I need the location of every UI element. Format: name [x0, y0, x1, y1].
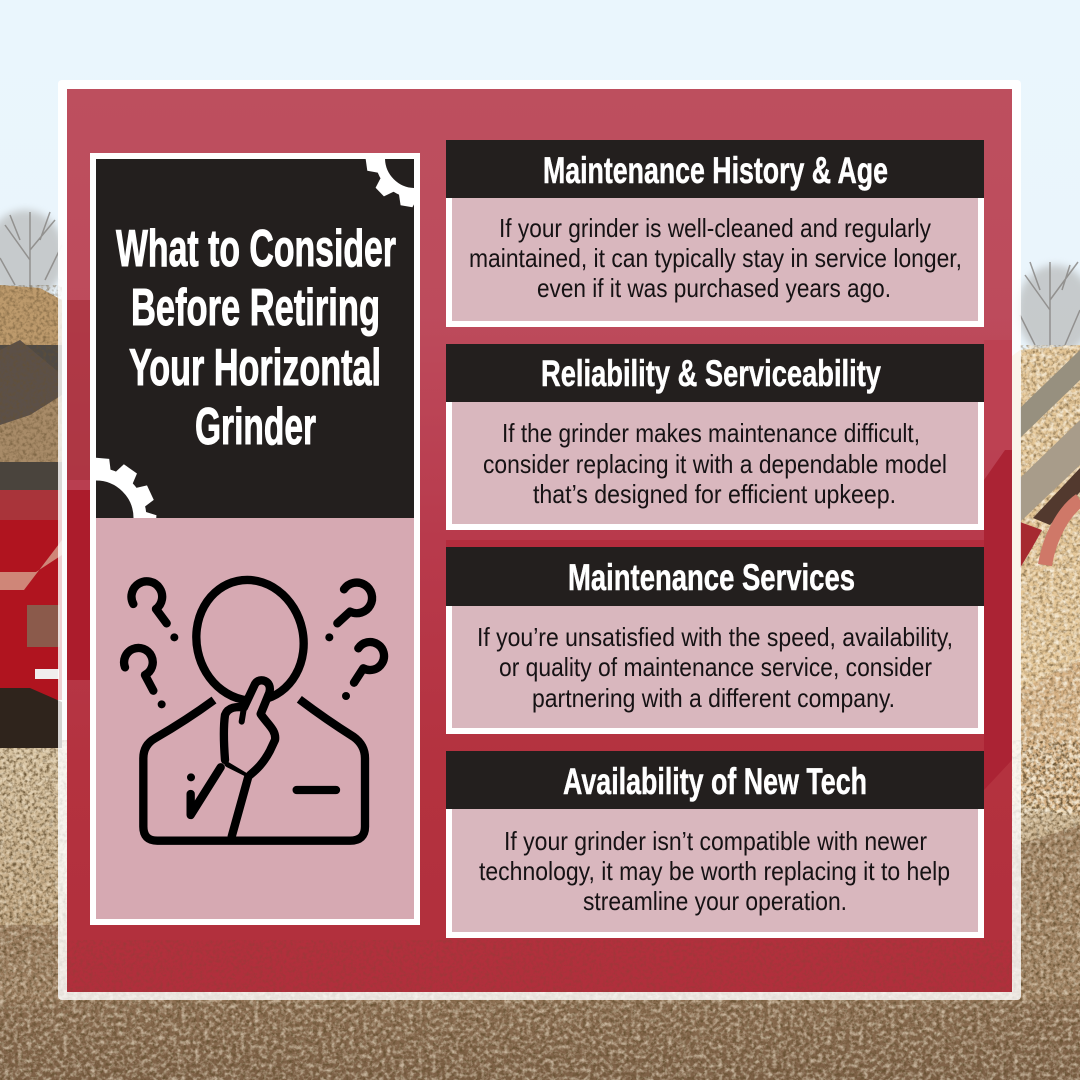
title: [116, 220, 396, 456]
card text: [469, 213, 962, 303]
card text: maintained, it can typically stay in service longer,: [469, 243, 962, 273]
card body: [449, 806, 981, 935]
card text: If your grinder is well-cleaned and regularly: [499, 213, 931, 243]
card header: [446, 344, 984, 402]
card text: partnering with a different company.: [532, 683, 895, 713]
panel: Maintenance History & Age: [446, 140, 984, 324]
title: Grinder: [195, 398, 316, 456]
card heading: Maintenance Services: [568, 557, 855, 598]
panel: left column: [90, 153, 420, 925]
title: Your Horizontal: [129, 339, 381, 397]
card text: [477, 622, 953, 713]
card body: [449, 603, 981, 731]
left column white border: [90, 153, 420, 925]
card text: [483, 418, 947, 509]
card header: [446, 140, 984, 198]
card text: streamline your operation.: [583, 886, 847, 916]
translucent white frame: [58, 80, 1021, 1000]
card heading: Availability of New Tech: [563, 761, 867, 802]
card text: technology, it may be worth replacing it to help: [479, 856, 950, 886]
panel: Maintenance Services: [446, 547, 984, 731]
title: Before Retiring: [131, 279, 380, 337]
left column dark header: [96, 159, 414, 518]
card text: consider replacing it with a dependable model: [483, 449, 947, 479]
icon: person thinking with question marks: [124, 570, 384, 841]
red panel: [67, 89, 1012, 992]
card heading: Maintenance History & Age: [543, 150, 888, 191]
panel: Availability of New Tech: [446, 751, 984, 935]
card text: If you’re unsatisfied with the speed, availability,: [477, 622, 953, 652]
card text: If your grinder isn’t compatible with newer: [504, 826, 927, 856]
card header: [446, 547, 984, 606]
icon: gear bottom left: [96, 458, 156, 518]
card text: even if it was purchased years ago.: [537, 273, 891, 303]
title: What to Consider: [116, 220, 396, 278]
card heading: Reliability & Serviceability: [541, 353, 881, 394]
card body: [449, 399, 981, 527]
icon: gear top right: [366, 159, 414, 208]
card body: [449, 195, 981, 324]
card text: or quality of maintenance service, consider: [499, 652, 932, 682]
panel: Reliability & Serviceability: [446, 344, 984, 527]
left column pink area: [96, 518, 414, 919]
card text: that’s designed for efficient upkeep.: [533, 479, 896, 509]
card header: [446, 751, 984, 809]
card text: If the grinder makes maintenance difficult,: [502, 418, 920, 448]
card text: [479, 826, 950, 916]
